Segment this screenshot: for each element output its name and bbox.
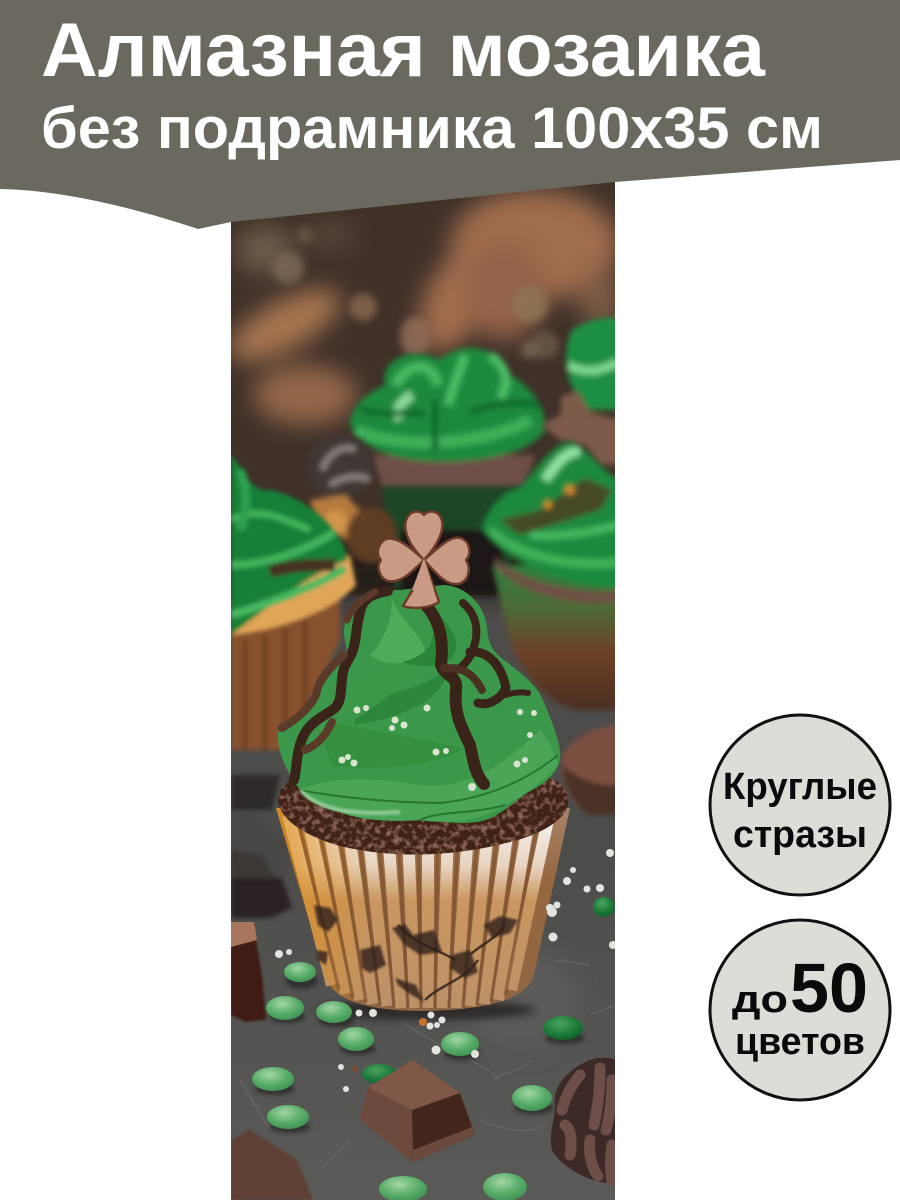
photo background: blurred brown bokeh bbox=[231, 182, 615, 595]
chocolate cube bbox=[360, 1060, 475, 1162]
brownie piece bbox=[231, 922, 266, 1022]
background cupcake: centre bbox=[350, 348, 545, 595]
background cupcake: right bbox=[481, 442, 620, 710]
chocolate drizzle bbox=[282, 591, 528, 784]
title: Алмазная мозаика bbox=[41, 8, 766, 93]
cake top bbox=[278, 770, 568, 855]
wrapper floral print bbox=[314, 905, 518, 1002]
sprinkles on frosting bbox=[338, 704, 537, 791]
table texture streaks bbox=[240, 960, 615, 1170]
cupcake shadow bbox=[315, 1000, 535, 1020]
background chocolate ball and caramel pieces bbox=[308, 435, 397, 563]
background cupcake: upper right with cookie bbox=[541, 318, 620, 465]
table surface bbox=[231, 595, 615, 1200]
product photo: green frosted cupcake bbox=[219, 170, 630, 1200]
badge: round rhinestones: Круглые bbox=[723, 766, 877, 808]
main cupcake bbox=[276, 512, 570, 1020]
frosting swirl bbox=[278, 585, 560, 823]
chocolate piece bottom left bbox=[231, 1130, 313, 1200]
badge: round rhinestones bbox=[710, 715, 890, 895]
foreground left: dark chocolate pieces bbox=[231, 775, 292, 918]
badge: round rhinestones: стразы bbox=[733, 814, 867, 856]
paper wrapper bbox=[276, 808, 570, 1011]
header banner bbox=[0, 0, 900, 229]
peanut butter cup at right bbox=[561, 725, 620, 815]
subtitle: без подрамника 100х35 см bbox=[41, 96, 823, 161]
scattered green candies and sprinkles bbox=[252, 849, 617, 1200]
clover cookie bbox=[378, 512, 469, 608]
badge: up to 50 colours bbox=[710, 920, 890, 1100]
badge: up to 50 colours: 50 bbox=[790, 949, 868, 1027]
badge: up to 50 colours: до bbox=[732, 979, 788, 1021]
badge: up to 50 colours: цветов bbox=[735, 1021, 865, 1063]
chocolate rosette bbox=[551, 1058, 620, 1183]
background cupcake: left bbox=[231, 455, 356, 750]
